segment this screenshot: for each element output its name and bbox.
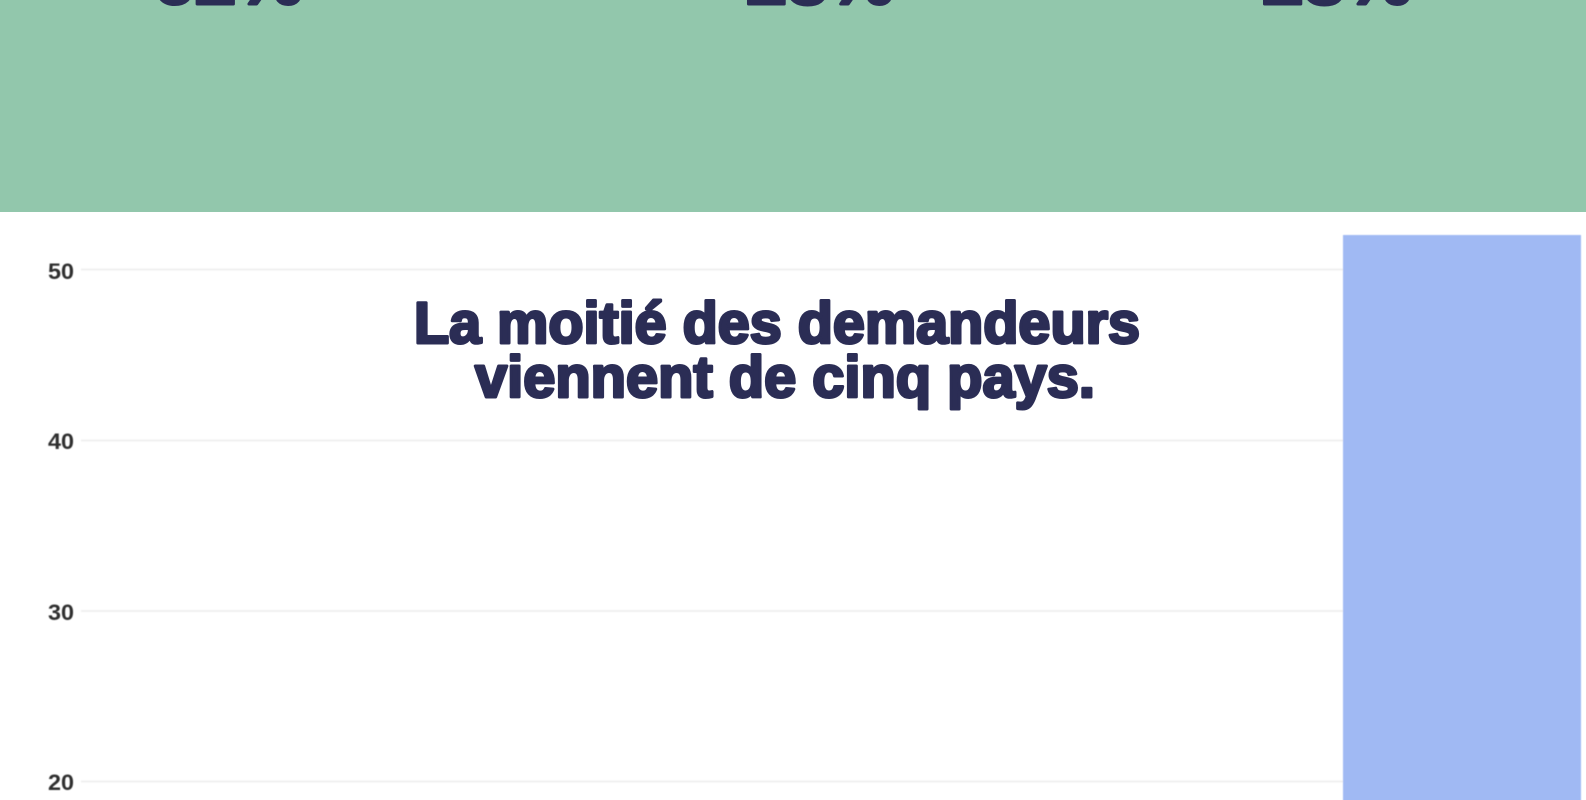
bar — [1343, 235, 1581, 800]
panel: green statistics band — [0, 0, 1586, 212]
y axis labels: 50 — [48, 259, 74, 284]
title: viennent de cinq pays. — [475, 345, 1095, 410]
y axis labels — [48, 259, 74, 795]
bar chart — [48, 235, 1581, 800]
y axis labels: 20 — [48, 770, 74, 795]
y axis labels: 30 — [48, 600, 74, 625]
title — [414, 291, 1140, 410]
title: La moitié des demandeurs — [414, 291, 1140, 356]
y axis labels: 40 — [48, 429, 74, 454]
